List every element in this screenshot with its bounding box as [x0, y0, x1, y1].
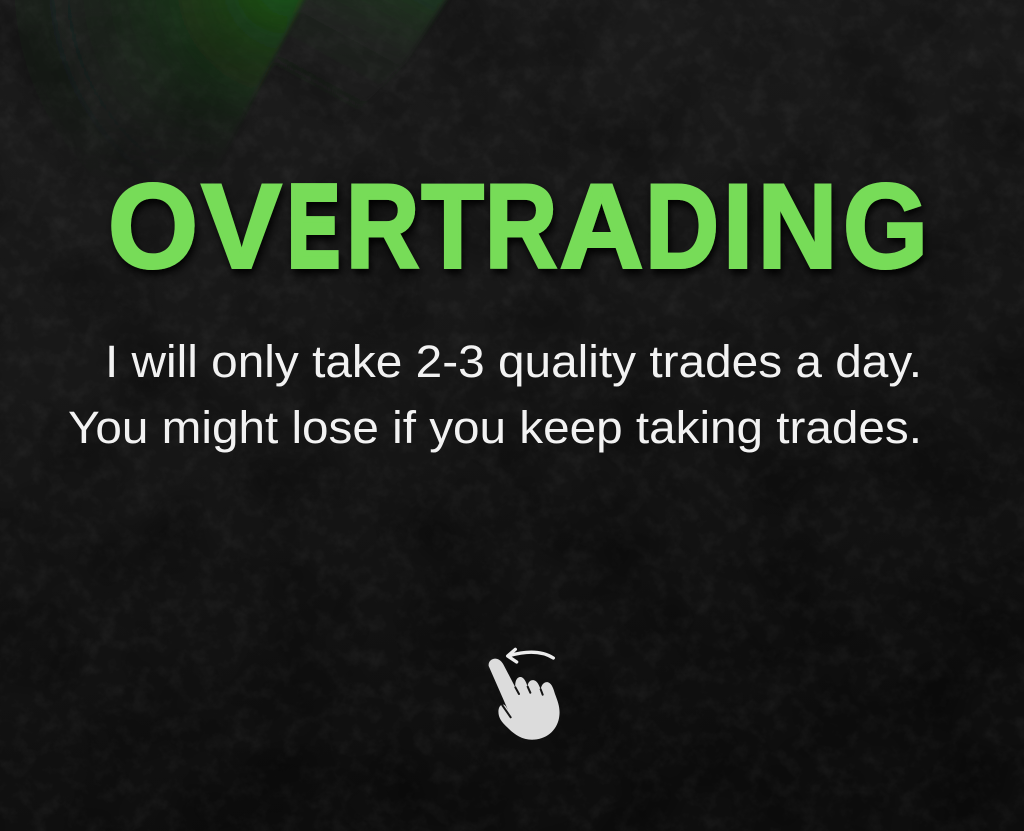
- title: R: [485, 160, 557, 294]
- title: E: [288, 161, 340, 291]
- title: O: [108, 160, 198, 294]
- text line 1: I will only take 2-3 quality trades a day.: [105, 336, 922, 387]
- title: T: [421, 160, 484, 294]
- text line 2: You might lose if you keep taking trades.: [68, 402, 922, 453]
- title: [108, 160, 928, 294]
- body text: [68, 336, 922, 453]
- icon: hand: [489, 659, 560, 740]
- icon: swipe arrow: [508, 649, 553, 662]
- background: green diagonal wedges: [88, 0, 446, 116]
- icon: swipe-left hand: [489, 649, 560, 740]
- title: A: [560, 160, 644, 294]
- title: D: [645, 160, 719, 294]
- title: V: [202, 160, 282, 294]
- finger separators: [502, 687, 543, 717]
- title: G: [843, 160, 928, 294]
- title: N: [758, 160, 838, 294]
- title: R: [346, 160, 419, 294]
- title: I: [723, 160, 753, 294]
